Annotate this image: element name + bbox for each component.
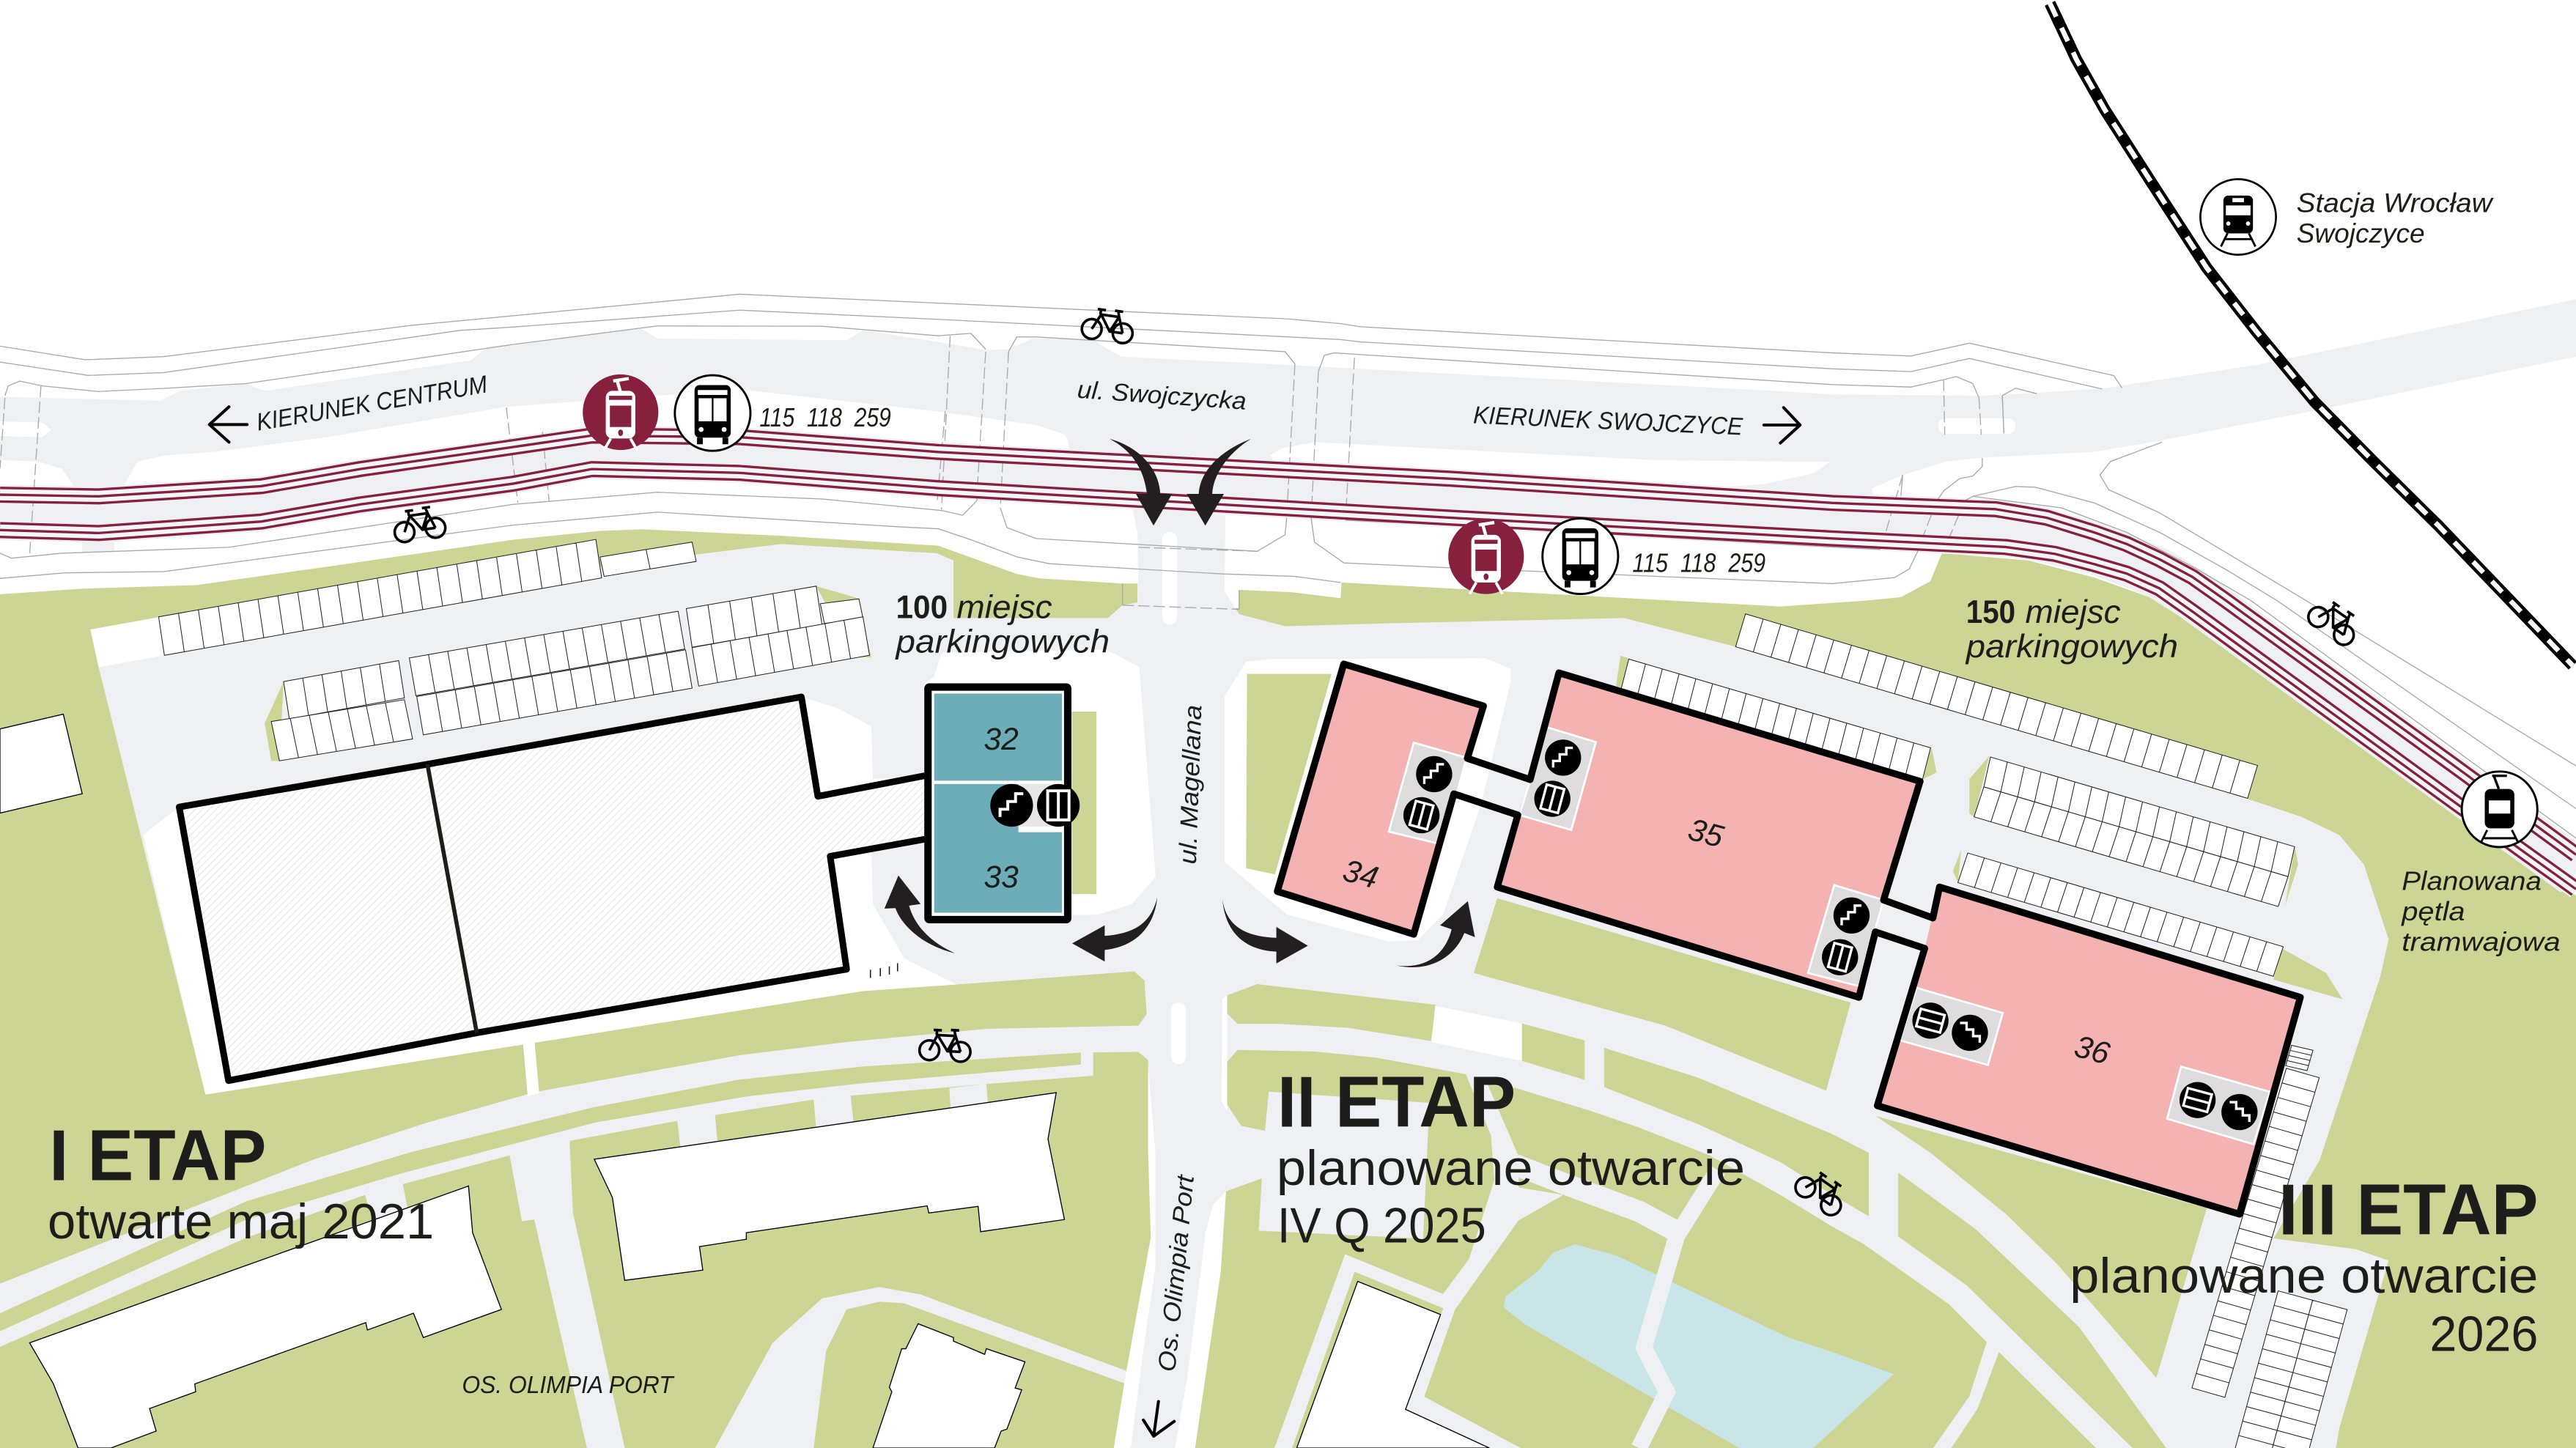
station label: Stacja Wrocław <box>2297 188 2494 218</box>
direction arrows on roads <box>210 407 1800 1436</box>
icons: stairs and lifts <box>990 739 2258 1130</box>
heading: stage I: otwarte maj 2021 <box>48 1194 434 1249</box>
heading: stage III <box>2070 1169 2538 1362</box>
kiosk units 32 and 33 <box>928 687 1068 920</box>
road labels: Os. Olimpia Port <box>1154 1172 1200 1373</box>
station label <box>2297 188 2494 248</box>
heading: stage II <box>1277 1062 1745 1254</box>
road labels <box>254 371 1743 1399</box>
bus line numbers: 115 118 259 <box>1632 549 1765 578</box>
parking label: 100 spaces <box>894 588 1110 660</box>
unit numbers: 36 <box>2071 1029 2114 1072</box>
parking label: 150 spaces: miejsc <box>2026 593 2121 630</box>
road labels: ul. Magellana <box>1175 704 1207 865</box>
planned tram loop icon <box>2462 772 2537 847</box>
public transport stop: south <box>1448 518 1618 594</box>
map background: green areas <box>0 529 2576 1448</box>
heading: stage III: 2026 <box>2429 1307 2538 1362</box>
heading: stage II: planowane otwarcie <box>1277 1141 1745 1196</box>
arrows: access directions <box>885 439 1475 967</box>
roads and paths <box>0 299 2576 1448</box>
road labels: KIERUNEK CENTRUM <box>254 371 490 437</box>
parking label: 150 spaces <box>1965 593 2178 665</box>
unit numbers <box>983 722 2114 1072</box>
parking label: 150 spaces: parkingowych <box>1965 627 2178 665</box>
heading: stage II: IV Q 2025 <box>1277 1199 1486 1254</box>
road labels: OS. OLIMPIA PORT <box>462 1372 675 1399</box>
thin road outlines <box>0 294 2576 838</box>
footpaths over green <box>1259 1006 1718 1448</box>
residential buildings <box>0 714 1489 1448</box>
bus line numbers <box>759 403 1765 578</box>
unit numbers: 33 <box>983 860 1019 895</box>
heading: stage I: I ETAP <box>49 1115 266 1195</box>
parking label: 100 spaces: parkingowych <box>894 622 1110 660</box>
parking: stage III rows <box>1620 614 2347 1448</box>
green patches <box>265 586 2342 1448</box>
tram tracks <box>0 435 2576 889</box>
station label: Swojczyce <box>2297 218 2425 248</box>
railway line <box>2050 3 2573 665</box>
heading: stage II: II ETAP <box>1277 1062 1516 1142</box>
hatched existing building: stage I <box>180 697 925 1081</box>
parking label: 100 spaces: 100 <box>896 588 948 625</box>
bus line numbers: 115 118 259 <box>759 403 891 432</box>
unit numbers: 35 <box>1684 812 1727 854</box>
white pavements and islands <box>0 418 2015 1448</box>
tram loop label: pętla <box>2401 897 2465 926</box>
parking label: 100 spaces: miejsc <box>957 588 1052 625</box>
tram loop label: tramwajowa <box>2402 928 2561 957</box>
heading: stage III: planowane otwarcie <box>2070 1249 2538 1304</box>
heading: stage III: III ETAP <box>2278 1169 2538 1249</box>
stage II and III buildings <box>1277 664 2300 1214</box>
parking label: 150 spaces: 150 <box>1966 593 2015 630</box>
bicycle icons <box>392 306 2364 1219</box>
heading: stage I <box>48 1115 434 1249</box>
unit numbers: 34 <box>1339 853 1382 895</box>
public transport stop: north <box>583 374 750 451</box>
pond <box>1504 1244 1894 1448</box>
tram loop label <box>2401 867 2561 957</box>
tram loop label: Planowana <box>2402 867 2542 896</box>
unit numbers: 32 <box>983 722 1019 757</box>
railway station icon <box>2200 179 2276 255</box>
road labels: ul. Swojczycka <box>1077 377 1247 415</box>
road labels: KIERUNEK SWOJCZYCE <box>1473 402 1743 441</box>
parking: stage I rows <box>158 539 898 978</box>
